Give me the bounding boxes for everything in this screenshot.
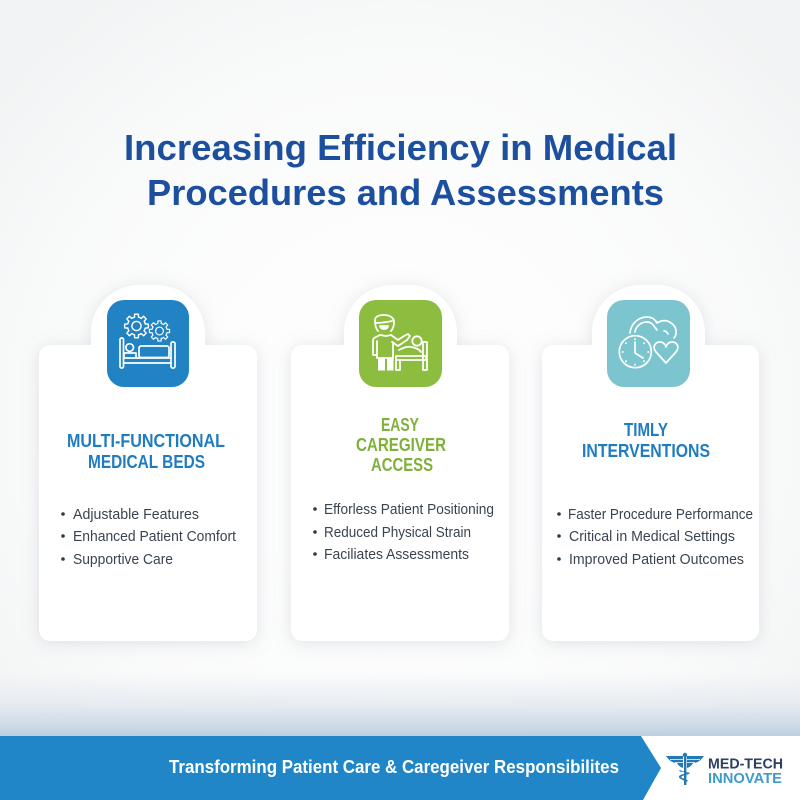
bullet list: Critical in Medical Settings bbox=[569, 529, 735, 545]
bullet list bbox=[61, 507, 236, 568]
heading: MEDICAL BEDS bbox=[88, 452, 205, 472]
bullet list: Adjustable Features bbox=[73, 507, 199, 523]
title: Procedures and Assessments bbox=[147, 172, 664, 213]
bullet list: Reduced Physical Strain bbox=[324, 525, 471, 541]
bullet list: Supportive Care bbox=[73, 552, 173, 568]
brand name: MED-TECH bbox=[708, 756, 783, 772]
card shape 1 bbox=[39, 285, 257, 641]
bullet list: Improved Patient Outcomes bbox=[569, 552, 744, 568]
icon: caduceus bbox=[666, 753, 704, 785]
bullet list: Faciliates Assessments bbox=[324, 547, 469, 563]
bullet list bbox=[557, 507, 753, 568]
footer text: Transforming Patient Care & Caregeiver Responsibilites bbox=[169, 757, 619, 777]
heading: EASY bbox=[381, 415, 419, 435]
card shape 3 bbox=[542, 285, 759, 641]
footer banner bbox=[0, 736, 800, 800]
icon: gears and bed bbox=[107, 300, 189, 387]
panel: multi-functional medical beds bbox=[39, 285, 257, 641]
title: Increasing Efficiency in Medical bbox=[124, 127, 677, 168]
card shape 2 bbox=[291, 285, 509, 641]
bullet list: Faster Procedure Performance bbox=[568, 507, 753, 523]
icon: clock, cloud and heart bbox=[607, 300, 690, 387]
heading: TIMLY bbox=[624, 420, 668, 440]
bullet list: Efforless Patient Positioning bbox=[324, 502, 494, 518]
panel: timly interventions bbox=[542, 285, 759, 641]
heading: CAREGIVER bbox=[356, 435, 446, 455]
logo: med-tech innovate bbox=[666, 753, 783, 787]
panel: easy caregiver access bbox=[291, 285, 509, 641]
icon: caregiver with patient in bed bbox=[359, 300, 442, 387]
heading bbox=[67, 431, 225, 472]
heading: INTERVENTIONS bbox=[582, 441, 710, 461]
bottom fade bbox=[0, 672, 800, 736]
heading bbox=[356, 415, 446, 475]
heading: ACCESS bbox=[371, 455, 433, 475]
title bbox=[124, 127, 677, 213]
white logo area bbox=[600, 736, 800, 800]
bullet list bbox=[313, 502, 494, 563]
bullet list: Enhanced Patient Comfort bbox=[73, 529, 236, 545]
blue arrow band bbox=[0, 736, 661, 800]
heading: MULTI-FUNCTIONAL bbox=[67, 431, 225, 451]
logo: med-tech innovate: INNOVATE bbox=[708, 771, 782, 787]
heading bbox=[582, 420, 710, 461]
